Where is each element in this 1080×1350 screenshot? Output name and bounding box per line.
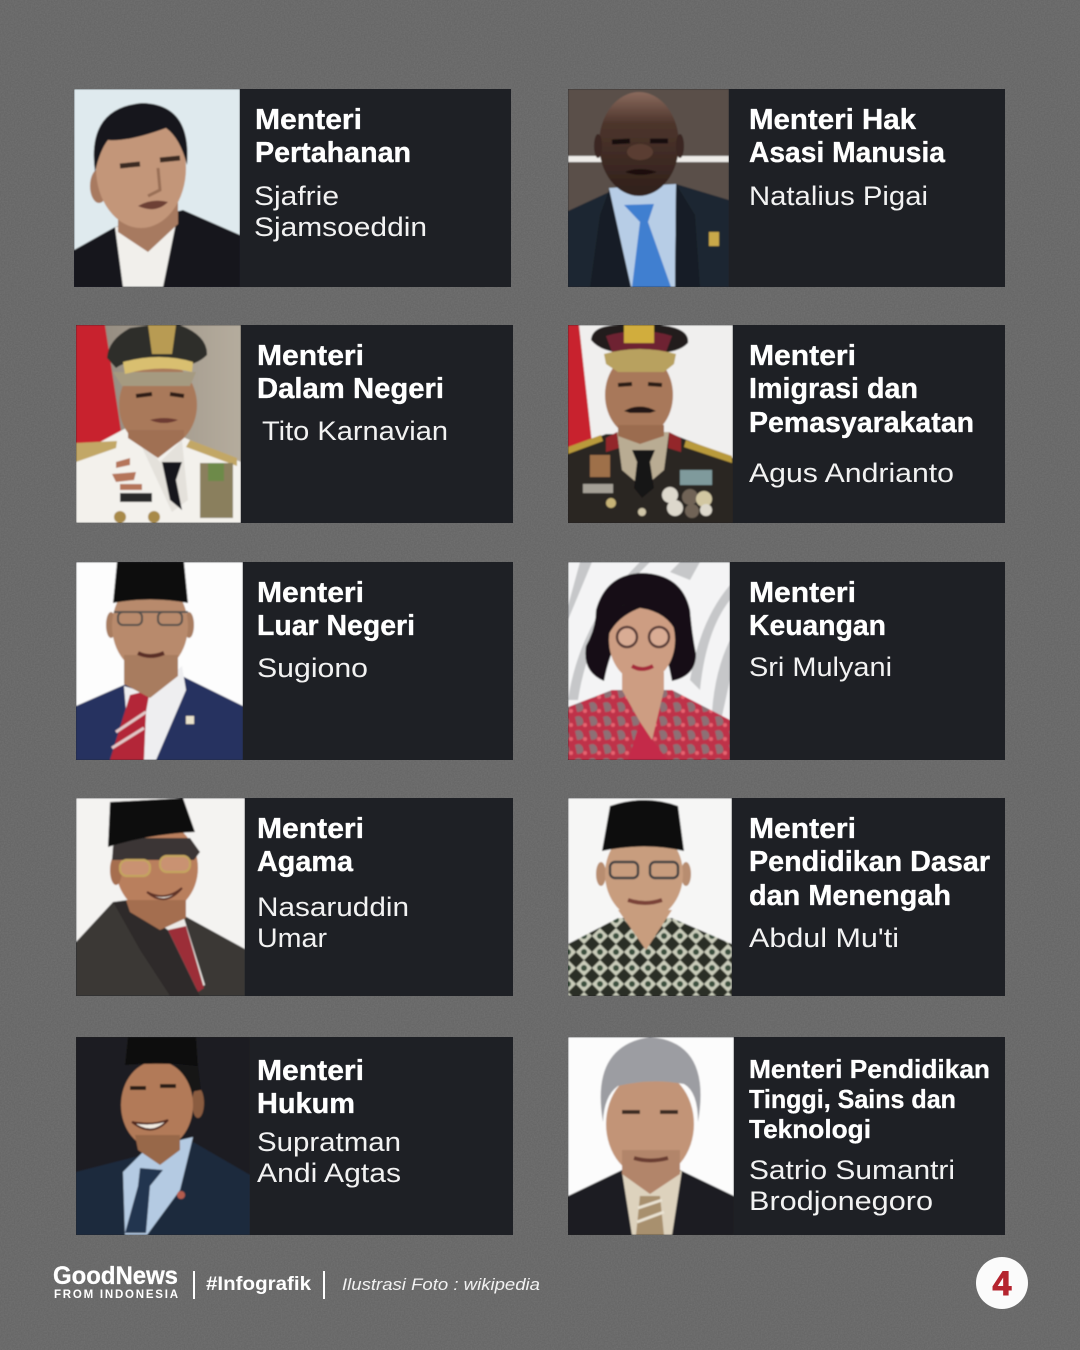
- heading: Menteri Pendidikan Tinggi, Sains dan Teknologi: Tinggi, Sains dan: [749, 1084, 956, 1114]
- name: Sugiono: Sugiono: [257, 653, 368, 683]
- heading: Menteri Luar Negeri: Luar Negeri: [257, 610, 415, 642]
- heading: Menteri Pendidikan Dasar dan Menengah: [749, 813, 990, 912]
- portrait: Sjafrie Sjamsoeddin: [74, 89, 240, 287]
- portrait: Nasaruddin Umar: [76, 798, 245, 996]
- panel: Menteri Luar Negeri: [76, 562, 513, 760]
- heading: Menteri Pertahanan: [255, 104, 411, 169]
- portrait: Natalius Pigai: [568, 89, 729, 287]
- name: Tito Karnavian: Tito Karnavian: [262, 416, 448, 446]
- panel: Menteri Pendidikan Tinggi, Sains dan Teknologi: [568, 1037, 1005, 1235]
- name: Nasaruddin Umar: [257, 892, 409, 953]
- portrait: Satrio Sumantri Brodjonegoro: [568, 1037, 734, 1235]
- panel: Menteri Pendidikan Dasar dan Menengah: [568, 798, 1005, 996]
- logo: GoodNews from Indonesia: [53, 1262, 178, 1301]
- panel: Menteri Hukum: [76, 1037, 513, 1235]
- page number badge: 4: [993, 1265, 1012, 1303]
- portrait: Supratman Andi Agtas: [76, 1037, 250, 1235]
- panel: Menteri Dalam Negeri: [76, 325, 513, 523]
- heading: Menteri Imigrasi dan Pemasyarakatan: Menteri: [749, 340, 856, 372]
- name: Nasaruddin Umar: Nasaruddin: [257, 892, 409, 922]
- panel: Menteri Imigrasi dan Pemasyarakatan: [568, 325, 1005, 523]
- name: Sri Mulyani: Sri Mulyani: [749, 652, 892, 682]
- name: Supratman Andi Agtas: Supratman: [257, 1127, 401, 1157]
- portrait: Abdul Mu'ti: [568, 798, 732, 996]
- heading: Menteri Pendidikan Dasar dan Menengah: Pendidikan Dasar: [749, 846, 990, 878]
- heading: Menteri Pendidikan Tinggi, Sains dan Teknologi: Teknologi: [749, 1114, 871, 1144]
- heading: Menteri Pertahanan: Pertahanan: [255, 137, 411, 169]
- heading: Menteri Hak Asasi Manusia: Menteri Hak: [749, 104, 917, 136]
- heading: Menteri Keuangan: Menteri: [749, 577, 856, 609]
- logo: GoodNews from Indonesia: GoodNews: [53, 1262, 178, 1290]
- heading: Menteri Hukum: [257, 1055, 364, 1120]
- heading: Menteri Dalam Negeri: Menteri: [257, 340, 364, 372]
- portrait: Sri Mulyani: [568, 562, 730, 760]
- heading: Menteri Keuangan: Keuangan: [749, 610, 886, 642]
- footer: [53, 1257, 1028, 1309]
- heading: Menteri Agama: [257, 813, 364, 878]
- name: Satrio Sumantri Brodjonegoro: Brodjonegoro: [749, 1186, 933, 1216]
- hashtag: #Infografik: [206, 1274, 311, 1295]
- name: Natalius Pigai: Natalius Pigai: [749, 181, 928, 211]
- heading: Menteri Dalam Negeri: Dalam Negeri: [257, 373, 444, 405]
- heading: Menteri Pendidikan Dasar dan Menengah: dan Menengah: [749, 880, 951, 912]
- panel: Menteri Hak Asasi Manusia: [568, 89, 1005, 287]
- heading: Menteri Hak Asasi Manusia: [749, 104, 946, 169]
- portrait: Sugiono: [76, 562, 243, 760]
- heading: Menteri Hukum: Hukum: [257, 1088, 355, 1120]
- heading: Menteri Luar Negeri: [257, 577, 415, 642]
- heading: Menteri Agama: Agama: [257, 846, 354, 878]
- name: Satrio Sumantri Brodjonegoro: Satrio Sumantri: [749, 1155, 955, 1185]
- page number badge: [976, 1257, 1028, 1309]
- name: Nasaruddin Umar: Umar: [257, 923, 327, 953]
- portrait: Tito Karnavian: [76, 325, 241, 523]
- portrait: Agus Andrianto: [568, 325, 733, 523]
- heading: Menteri Pendidikan Tinggi, Sains dan Teknologi: Menteri Pendidikan: [749, 1054, 990, 1084]
- panel: Menteri Keuangan: [568, 562, 1005, 760]
- heading: Menteri Agama: Menteri: [257, 813, 364, 845]
- name: Supratman Andi Agtas: [257, 1127, 401, 1188]
- name: Satrio Sumantri Brodjonegoro: [749, 1155, 955, 1216]
- heading: Menteri Keuangan: [749, 577, 886, 642]
- heading: Menteri Luar Negeri: Menteri: [257, 577, 364, 609]
- heading: Menteri Hukum: Menteri: [257, 1055, 364, 1087]
- name: Sjafrie Sjamsoeddin: [254, 181, 427, 242]
- heading: Menteri Pendidikan Tinggi, Sains dan Teknologi: [749, 1054, 990, 1144]
- name: Abdul Mu'ti: Abdul Mu'ti: [749, 923, 899, 953]
- name: Agus Andrianto: Agus Andrianto: [749, 458, 954, 488]
- logo: GoodNews from Indonesia: FROM INDONESIA: [54, 1289, 178, 1301]
- panel: Menteri Agama: [76, 798, 513, 996]
- heading: Menteri Hak Asasi Manusia: Asasi Manusia: [749, 137, 946, 169]
- name: Sjafrie Sjamsoeddin: Sjamsoeddin: [254, 212, 427, 242]
- name: Sjafrie Sjamsoeddin: Sjafrie: [254, 181, 339, 211]
- photo credit: Ilustrasi Foto : wikipedia: [342, 1275, 540, 1294]
- heading: Menteri Imigrasi dan Pemasyarakatan: Imigrasi dan: [749, 373, 918, 405]
- heading: Menteri Imigrasi dan Pemasyarakatan: Pemasyarakatan: [749, 407, 974, 439]
- heading: Menteri Pendidikan Dasar dan Menengah: Menteri: [749, 813, 856, 845]
- panel: Menteri Pertahanan: [74, 89, 511, 287]
- heading: Menteri Imigrasi dan Pemasyarakatan: [749, 340, 974, 439]
- heading: Menteri Pertahanan: Menteri: [255, 104, 362, 136]
- name: Supratman Andi Agtas: Andi Agtas: [257, 1158, 401, 1188]
- heading: Menteri Dalam Negeri: [257, 340, 444, 405]
